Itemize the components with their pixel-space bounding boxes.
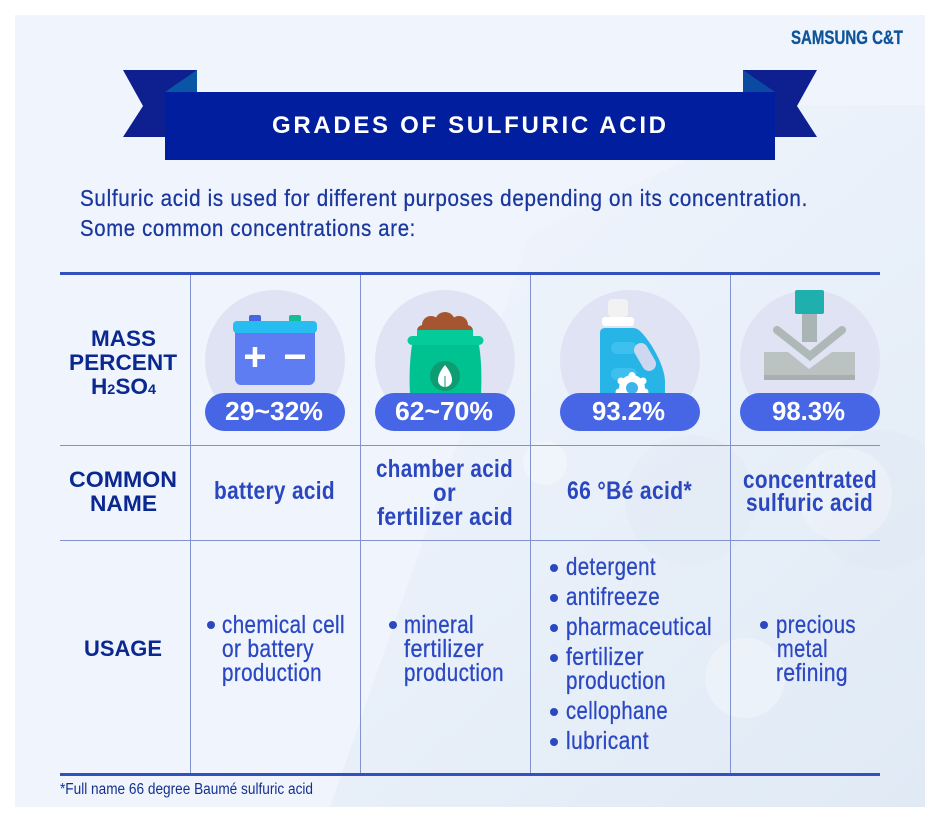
intro text: Sulfuric acid is used for different purposes depending on its concentration. bbox=[80, 185, 808, 211]
row heading: mass percent: H2SO4 bbox=[91, 374, 156, 399]
logo: Samsung C&T: SAMSUNG C&T bbox=[791, 28, 903, 49]
row heading: usage: USAGE bbox=[84, 636, 162, 661]
usage: battery acid: or battery bbox=[222, 635, 314, 663]
usage: battery acid bbox=[207, 611, 345, 687]
common name: chamber acid or fertilizer acid: fertilizer acid bbox=[377, 503, 513, 531]
usage: concentrated acid: refining bbox=[776, 659, 848, 687]
common name: battery acid: battery acid bbox=[214, 477, 335, 505]
row heading: mass percent: PERCENT bbox=[69, 350, 178, 375]
percentage badge: 29~32%: 29~32% bbox=[225, 396, 323, 426]
intro text bbox=[80, 185, 808, 241]
common name: concentrated sulfuric acid: concentrated bbox=[743, 466, 877, 494]
usage: concentrated acid bbox=[760, 611, 856, 687]
usage: 66 Be acid list: pharmaceutical bbox=[566, 613, 712, 641]
usage: concentrated acid: metal bbox=[777, 635, 828, 663]
usage: 66 Be acid list bbox=[550, 553, 712, 755]
usage: chamber acid bbox=[389, 611, 504, 687]
icon: detergent bottle bbox=[560, 290, 700, 430]
common name: chamber acid or fertilizer acid bbox=[376, 455, 513, 531]
usage: 66 Be acid list: cellophane bbox=[566, 697, 668, 725]
common name: 66 Be acid: 66 °Bé acid* bbox=[567, 477, 692, 505]
usage: 66 Be acid list: antifreeze bbox=[566, 583, 660, 611]
percentage badge: 62~70%: 62~70% bbox=[395, 396, 493, 426]
row heading: mass percent bbox=[69, 326, 178, 399]
usage: chamber acid: mineral bbox=[404, 611, 474, 639]
row heading: common name: COMMON bbox=[69, 467, 177, 492]
usage: chamber acid: production bbox=[404, 659, 504, 687]
usage: 66 Be acid list: production bbox=[566, 667, 666, 695]
row heading: common name: NAME bbox=[90, 491, 157, 516]
usage: battery acid: production bbox=[222, 659, 322, 687]
intro text: Some common concentrations are: bbox=[80, 215, 416, 241]
usage: chamber acid: fertilizer bbox=[404, 635, 484, 663]
icon: fertilizer sack bbox=[375, 290, 515, 430]
title: GRADES OF SULFURIC ACID bbox=[272, 112, 666, 139]
percentage badge: 98.3%: 98.3% bbox=[772, 396, 845, 426]
usage: concentrated acid: precious bbox=[776, 611, 856, 639]
common name: concentrated sulfuric acid bbox=[743, 466, 877, 517]
table grid bbox=[60, 272, 880, 776]
title ribbon bbox=[123, 70, 817, 160]
usage: battery acid: chemical cell bbox=[222, 611, 345, 639]
footnote: *Full name 66 degree Baumé sulfuric acid bbox=[60, 781, 313, 798]
percentage badge: 62~70% bbox=[375, 393, 515, 431]
common name: chamber acid or fertilizer acid: chamber acid bbox=[376, 455, 513, 483]
common name: concentrated sulfuric acid: sulfuric acid bbox=[746, 489, 873, 517]
percentage badge: 29~32% bbox=[205, 393, 345, 431]
usage: 66 Be acid list: fertilizer bbox=[566, 643, 644, 671]
usage: 66 Be acid list: lubricant bbox=[566, 727, 649, 755]
percentage badge: 98.3% bbox=[740, 393, 880, 431]
common name: chamber acid or fertilizer acid: or bbox=[433, 479, 456, 507]
usage: 66 Be acid list: detergent bbox=[566, 553, 656, 581]
percentage badge: 93.2%: 93.2% bbox=[592, 396, 665, 426]
row heading: mass percent: MASS bbox=[91, 326, 156, 351]
icon: battery bbox=[205, 290, 345, 430]
percentage badge: 93.2% bbox=[560, 393, 700, 431]
icon: metal press bbox=[740, 290, 880, 430]
row heading: common name bbox=[69, 467, 177, 516]
